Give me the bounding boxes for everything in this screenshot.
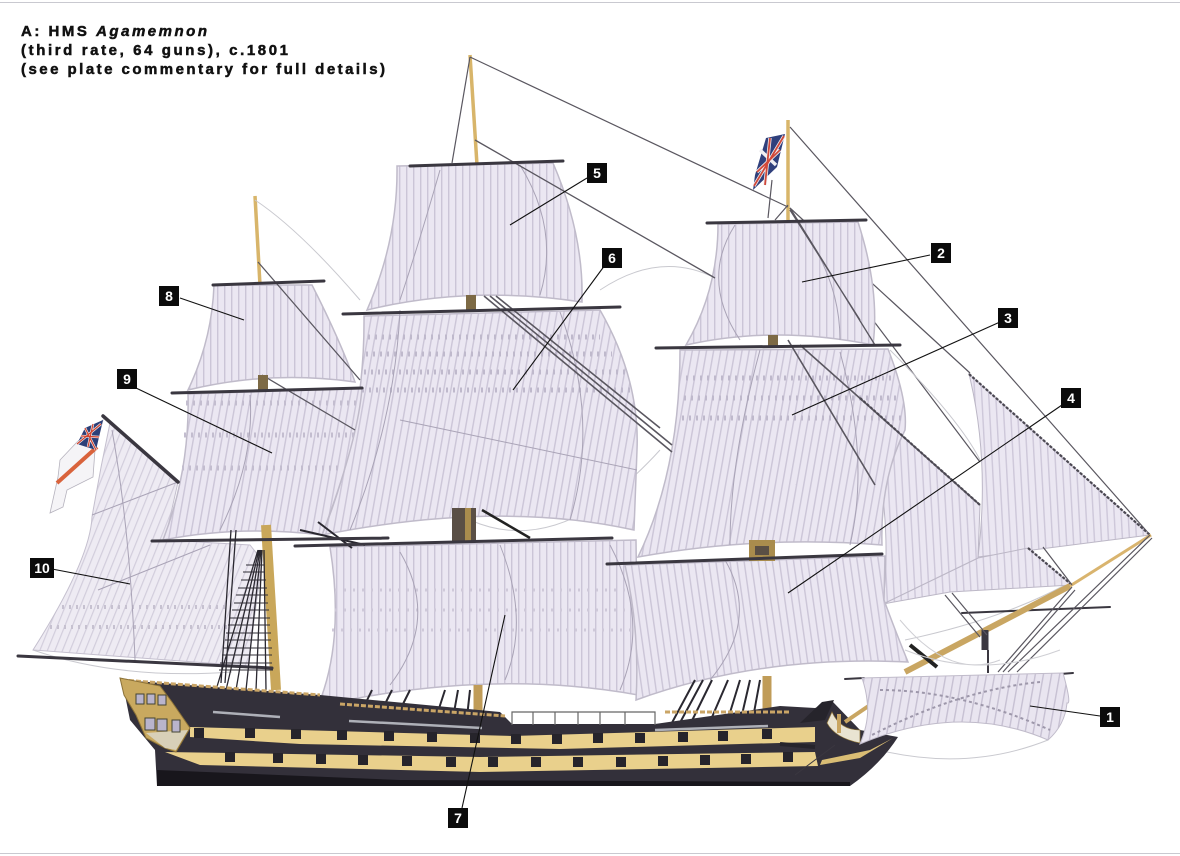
callout: 4: 4 — [1067, 390, 1075, 406]
sail: 3 fore topsail — [638, 349, 905, 557]
callout: 9 — [117, 369, 137, 389]
bowsprit and jib-boom — [900, 535, 1152, 673]
sail: 2 fore topgallant — [686, 222, 875, 345]
sail: 8 mizzen topgallant — [188, 285, 355, 390]
sail seams and reef bands — [50, 165, 904, 690]
sail: 7 main course — [318, 540, 638, 706]
spritsail seams — [872, 682, 1050, 735]
title: (see plate commentary for full details) — [21, 61, 385, 78]
callout: 10 — [30, 558, 54, 578]
sail: 9 mizzen topsail — [163, 388, 362, 540]
callout: 2 — [931, 243, 951, 263]
callout: 3 — [998, 308, 1018, 328]
callout: 10: 10 — [34, 560, 50, 576]
sail: 4 fore course — [625, 556, 908, 700]
lower masts — [263, 295, 773, 715]
callout lines — [52, 178, 1100, 808]
callout: 9: 9 — [123, 371, 131, 387]
callout: 2: 2 — [937, 245, 945, 261]
callout: 7: 7 — [454, 810, 462, 826]
hull: gun ports — [194, 728, 793, 767]
sail: fore staysail — [883, 548, 1072, 604]
callout: 7 — [448, 808, 468, 828]
masts and background rigging — [33, 55, 1150, 759]
hull — [120, 678, 898, 786]
callout: 1 — [1100, 707, 1120, 727]
sail: 1 spritsail — [860, 673, 1069, 744]
running rigging over sails — [258, 140, 1150, 585]
callout: 1: 1 — [1106, 709, 1114, 725]
sail: fore topmast staysail — [860, 398, 980, 604]
sail: jib — [969, 374, 1150, 557]
sail: 5 main topgallant — [367, 163, 582, 310]
hull: upper yellow strake — [190, 727, 815, 749]
callout: 6 — [602, 248, 622, 268]
title: A: HMS Agamemnon — [21, 23, 207, 40]
callout: 3: 3 — [1004, 310, 1012, 326]
stern galleries — [120, 678, 190, 752]
callout: 8 — [159, 286, 179, 306]
yards — [18, 161, 1110, 679]
hull: channels — [213, 712, 768, 730]
callout: 5 — [587, 163, 607, 183]
title: (third rate, 64 guns), c.1801 — [21, 42, 288, 59]
callout: 4 — [1061, 388, 1081, 408]
callout: 5: 5 — [593, 165, 601, 181]
shrouds — [216, 530, 760, 757]
bow beakhead — [780, 700, 893, 775]
sail: 6 main topsail — [322, 310, 637, 535]
callout: 8: 8 — [165, 288, 173, 304]
flag: white ensign at stern — [50, 420, 103, 513]
sail: 10 spanker — [33, 423, 262, 666]
hull: lower yellow strake — [165, 752, 818, 772]
callout: 6: 6 — [608, 250, 616, 266]
flag: union jack at fore — [753, 134, 785, 190]
title — [21, 23, 385, 78]
hull: rails — [122, 680, 790, 716]
